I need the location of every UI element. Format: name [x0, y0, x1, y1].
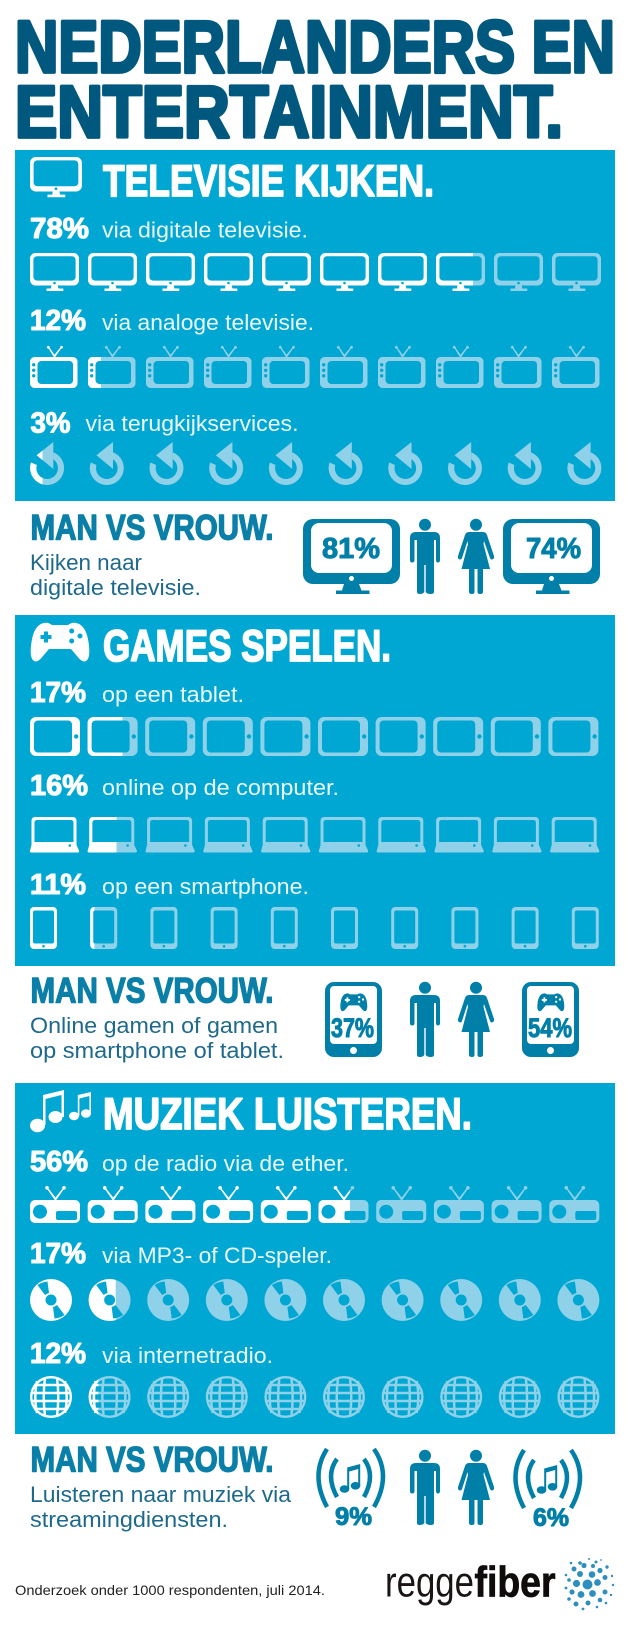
- icon: monitor: [30, 157, 82, 197]
- icon row: globes: [31, 1377, 598, 1417]
- text: kijken naar digitale televisie: [30, 550, 201, 600]
- heading: televisie kijken: TELEVISIE KIJKEN.: [103, 157, 434, 206]
- heading: man vs vrouw: MAN VS VROUW.: [30, 970, 274, 1010]
- label: op de radio via de ether: op de radio via de ether.: [102, 1151, 349, 1176]
- panel: man vs vrouw televisie: [30, 508, 600, 600]
- heading: man vs vrouw: MAN VS VROUW.: [30, 1440, 274, 1480]
- icon: monitor 81%: [303, 519, 400, 594]
- label: via terugkijkservices: via terugkijkservices.: [86, 411, 298, 436]
- icon: phone 54%: 54%: [528, 1013, 572, 1043]
- panel: man vs vrouw games: [30, 970, 579, 1063]
- label: online op de computer: online op de computer.: [102, 775, 339, 800]
- icon row: digital televisions: [30, 253, 601, 291]
- icon: man: [410, 519, 440, 594]
- text: online gamen: op smartphone of tablet.: [30, 1038, 284, 1063]
- icon: monitor 74%: [503, 519, 600, 594]
- heading: man vs vrouw: MAN VS VROUW.: [30, 508, 274, 548]
- stat: 3%: 3%: [30, 408, 70, 440]
- stat: 78%: 78%: [30, 213, 89, 245]
- text: luisteren naar muziek: streamingdiensten.: [30, 1507, 228, 1532]
- stat: 17%: 17%: [30, 677, 86, 709]
- panel: muziek luisteren: [15, 1083, 615, 1434]
- stat: 56%: 56%: [30, 1146, 88, 1178]
- icon: phone 37%: 37%: [331, 1013, 374, 1043]
- text: kijken naar digitale televisie: Kijken naar: [30, 550, 142, 575]
- icon: streaming music 6%: 6%: [533, 1504, 569, 1532]
- stat: 17%: 17%: [30, 1238, 86, 1270]
- panel: televisie kijken: [15, 150, 615, 501]
- text: online gamen: [30, 1013, 284, 1063]
- icon: woman: [458, 1450, 494, 1525]
- icon row: replay arrows: [30, 442, 601, 485]
- icon: streaming music 9%: 9%: [335, 1503, 372, 1531]
- heading: games spelen: GAMES SPELEN.: [103, 622, 391, 671]
- icon: phone 54%: [522, 982, 579, 1057]
- label: via digitale televisie: via digitale televisie.: [102, 218, 308, 242]
- heading: muziek luisteren: MUZIEK LUISTEREN.: [103, 1090, 472, 1139]
- icon row: smartphones: [30, 907, 599, 949]
- icon row: radios: [30, 1186, 599, 1223]
- panel: games spelen: [15, 615, 615, 966]
- title: [15, 5, 615, 153]
- logo: reggefiber: fiber: [474, 1558, 556, 1606]
- icon: monitor 74%: 74%: [526, 533, 581, 565]
- stat: 12%: 12%: [30, 1338, 86, 1370]
- logo: reggefiber: regge: [385, 1558, 474, 1606]
- icon: monitor 81%: 81%: [322, 533, 380, 565]
- label: op een tablet: op een tablet.: [102, 682, 244, 707]
- icon: game controller: [31, 623, 89, 661]
- icon: man: [410, 1450, 440, 1525]
- text: luisteren naar muziek: Luisteren naar muziek via: [30, 1482, 291, 1507]
- logo: reggefiber: [385, 1558, 614, 1610]
- panel: man vs vrouw muziek: [30, 1440, 580, 1532]
- icon: woman: [458, 519, 494, 594]
- label: op een smartphone: op een smartphone.: [102, 874, 309, 899]
- icon: streaming music 9%: [318, 1449, 383, 1531]
- text: luisteren naar muziek: [30, 1482, 291, 1532]
- icon: music notes: [30, 1090, 91, 1132]
- footnote: Onderzoek onder 1000 respondenten, juli 2014.: [15, 1582, 325, 1598]
- icon: man: [410, 982, 440, 1057]
- label: via internetradio: via internetradio.: [102, 1343, 273, 1368]
- stat: 16%: 16%: [30, 770, 88, 802]
- icon row: analogue televisions: [30, 346, 600, 388]
- stat: 11%: 11%: [30, 869, 86, 901]
- stat: 12%: 12%: [30, 305, 86, 337]
- icon: phone 37%: [325, 982, 382, 1057]
- icon row: tablets: [30, 717, 598, 756]
- text: kijken naar digitale televisie: digitale televisie.: [30, 575, 201, 600]
- icon row: laptops: [30, 817, 599, 852]
- icon: streaming music 6%: [516, 1450, 580, 1532]
- label: via mp3- of cd-speler: via MP3- of CD-speler.: [102, 1243, 332, 1268]
- icon row: compact discs: [30, 1279, 599, 1321]
- label: via analoge televisie: via analoge televisie.: [102, 310, 314, 335]
- text: online gamen: Online gamen of gamen: [30, 1013, 278, 1038]
- icon: woman: [458, 982, 494, 1057]
